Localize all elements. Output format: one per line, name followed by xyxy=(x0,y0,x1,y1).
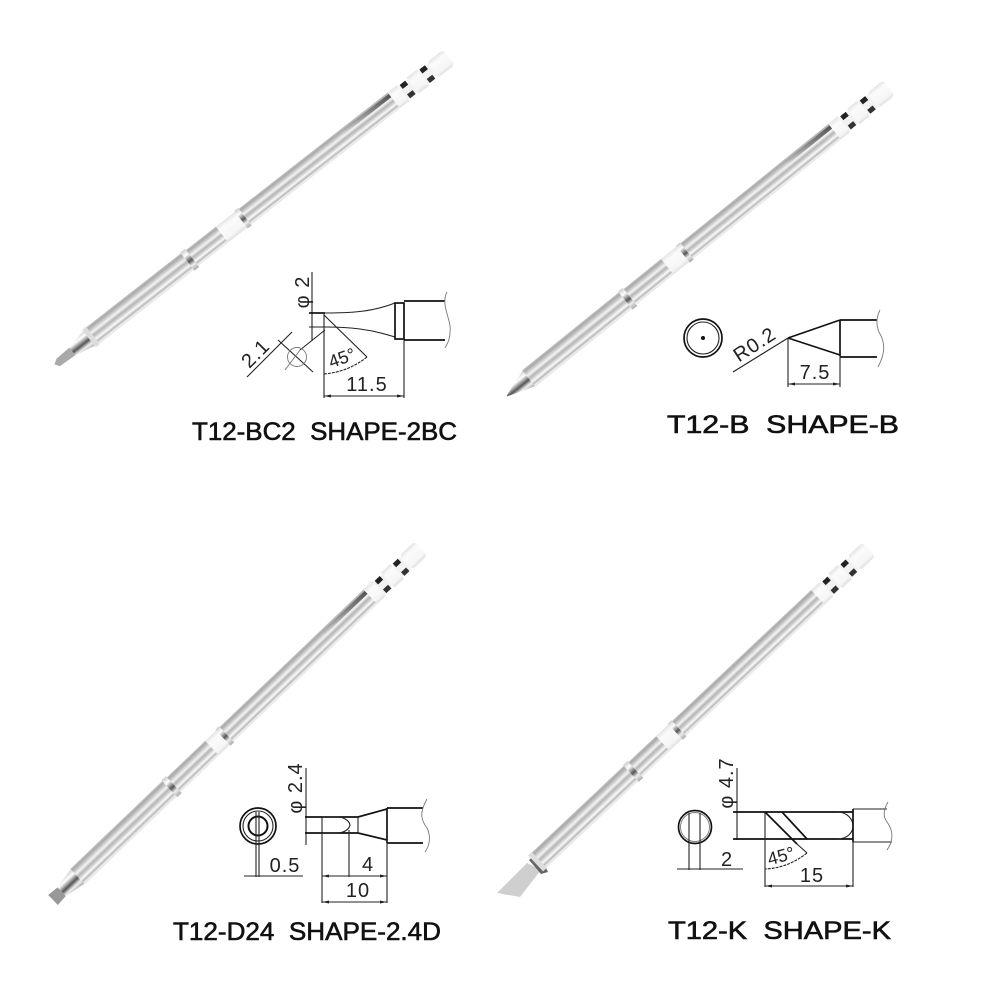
label: 0.5: 0.5 xyxy=(270,855,300,877)
label: 10: 10 xyxy=(346,880,370,902)
diagram: T12-B dimensions xyxy=(684,310,884,387)
diagram: T12-K dimensions xyxy=(677,757,892,888)
tip photo: T12-BC2 xyxy=(48,48,456,374)
label: 11.5: 11.5 xyxy=(346,374,388,396)
tip photo: T12-D24 xyxy=(45,540,429,908)
caption: T12-K: T12-K SHAPE-K xyxy=(668,917,891,945)
caption: T12-B: T12-B SHAPE-B xyxy=(667,411,899,439)
label: R0.2: R0.2 xyxy=(730,323,780,367)
label: 15: 15 xyxy=(800,865,824,887)
tip photo: T12-K xyxy=(497,541,877,897)
label: 2: 2 xyxy=(721,849,733,871)
label: 2.1: 2.1 xyxy=(237,335,275,373)
diagram: T12-BC2 dimensions xyxy=(237,272,450,398)
label: phi 4.7: φ 4.7 xyxy=(716,757,738,809)
label: phi 2.4: φ 2.4 xyxy=(285,762,307,814)
label: 7.5: 7.5 xyxy=(800,362,830,384)
caption: T12-BC2: T12-BC2 SHAPE-2BC xyxy=(192,418,457,446)
label: 4: 4 xyxy=(362,854,374,876)
tip photo: T12-B xyxy=(500,79,896,405)
diagram: T12-D24 dimensions xyxy=(240,762,429,904)
label: phi 2: φ 2 xyxy=(292,276,314,308)
label: 45 degrees: 45° xyxy=(765,843,797,869)
caption: T12-D24: T12-D24 SHAPE-2.4D xyxy=(173,918,441,946)
label: 45 degrees: 45° xyxy=(326,344,358,372)
